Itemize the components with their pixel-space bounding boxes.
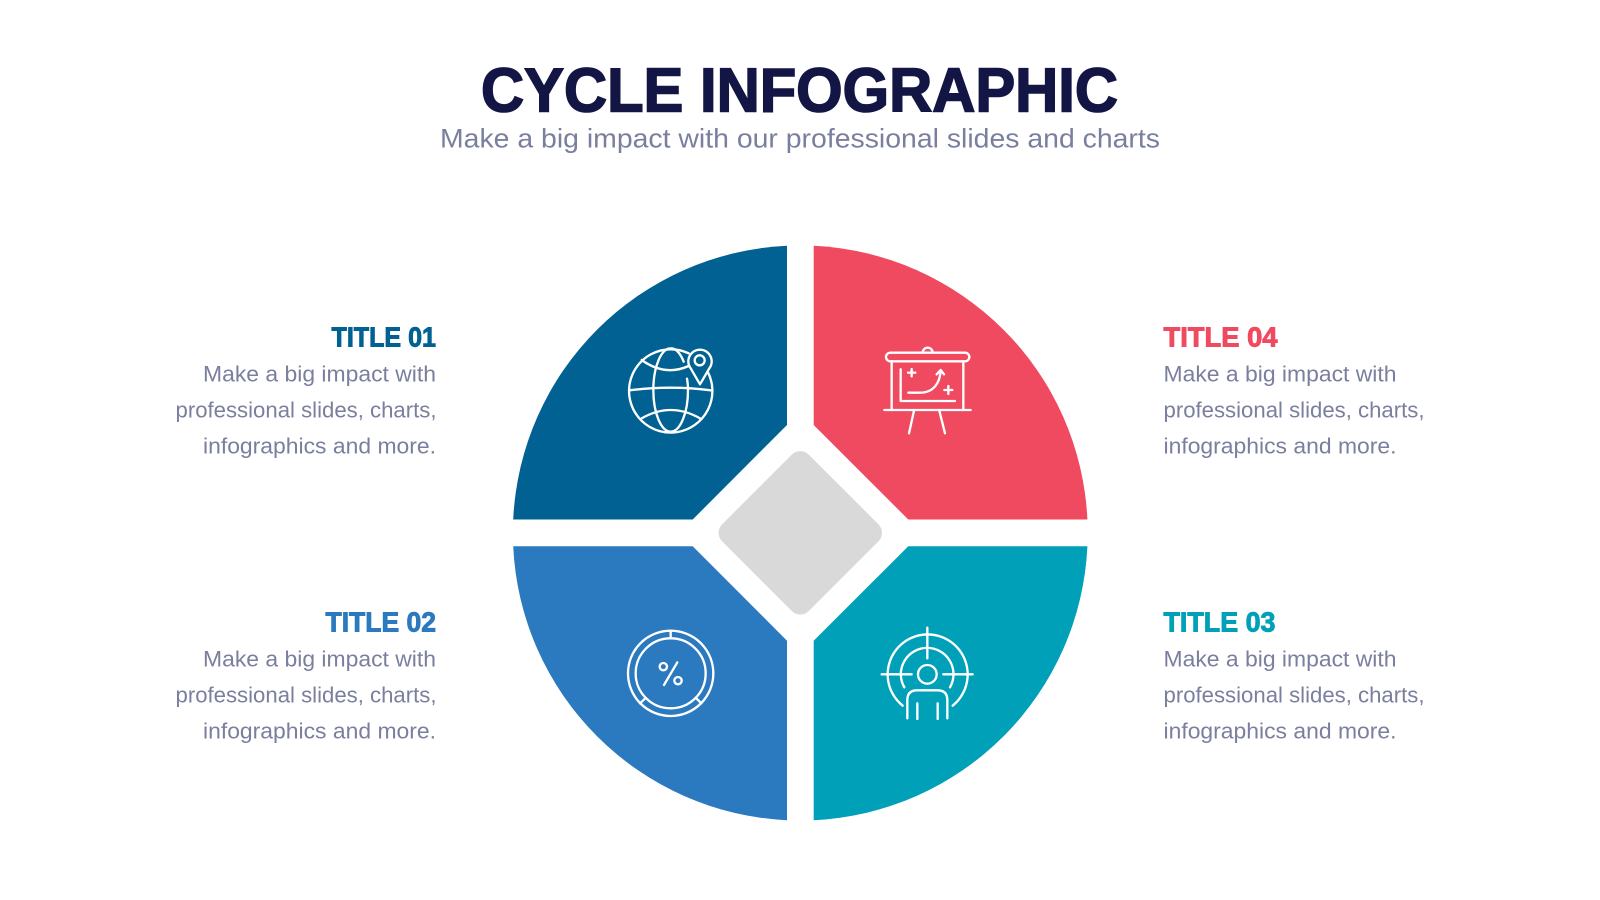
body text: title 02: professional slides, charts, (176, 682, 436, 707)
body text: title 04: Make a big impact with (1164, 362, 1396, 387)
heading: title 04: TITLE 04 (1164, 322, 1278, 353)
body text: title 03: professional slides, charts, (1164, 682, 1424, 707)
body text: title 01: professional slides, charts, (176, 398, 436, 423)
title: CYCLE INFOGRAPHIC (481, 56, 1118, 126)
body text: title 04 (1164, 362, 1424, 459)
body text: title 02 (176, 646, 436, 743)
center diamond (714, 446, 887, 619)
text block: title 04 (1164, 322, 1424, 459)
panel: segment 04 (814, 246, 1087, 520)
body text: title 02: infographics and more. (203, 718, 436, 743)
panel: segment 02 (513, 546, 787, 820)
text block: title 02 (176, 606, 436, 743)
body text: title 03 (1164, 646, 1424, 743)
heading: title 03: TITLE 03 (1164, 606, 1276, 637)
heading: title 02: TITLE 02 (326, 606, 436, 637)
icon: presentation board (884, 348, 971, 433)
body text: title 01 (176, 362, 436, 459)
text block: title 03 (1164, 606, 1424, 743)
icon: target on person (882, 628, 973, 719)
body text: title 03: Make a big impact with (1164, 646, 1396, 671)
body text: title 04: professional slides, charts, (1164, 398, 1424, 423)
subtitle: Make a big impact with our professional slides and charts (440, 124, 1160, 154)
body text: title 01: Make a big impact with (203, 362, 436, 387)
body text: title 04: infographics and more. (1164, 434, 1396, 459)
icon: percent dial (628, 631, 713, 716)
panel: segment 01 (513, 246, 787, 520)
body text: title 01: infographics and more. (203, 434, 436, 459)
body text: title 02: Make a big impact with (203, 646, 436, 671)
icon: globe with pin (629, 348, 712, 433)
panel: segment 03 (814, 546, 1087, 820)
body text: title 03: infographics and more. (1164, 718, 1396, 743)
heading: title 01: TITLE 01 (332, 322, 436, 353)
text block: title 01 (176, 322, 436, 459)
cycle diagram (513, 246, 1087, 820)
